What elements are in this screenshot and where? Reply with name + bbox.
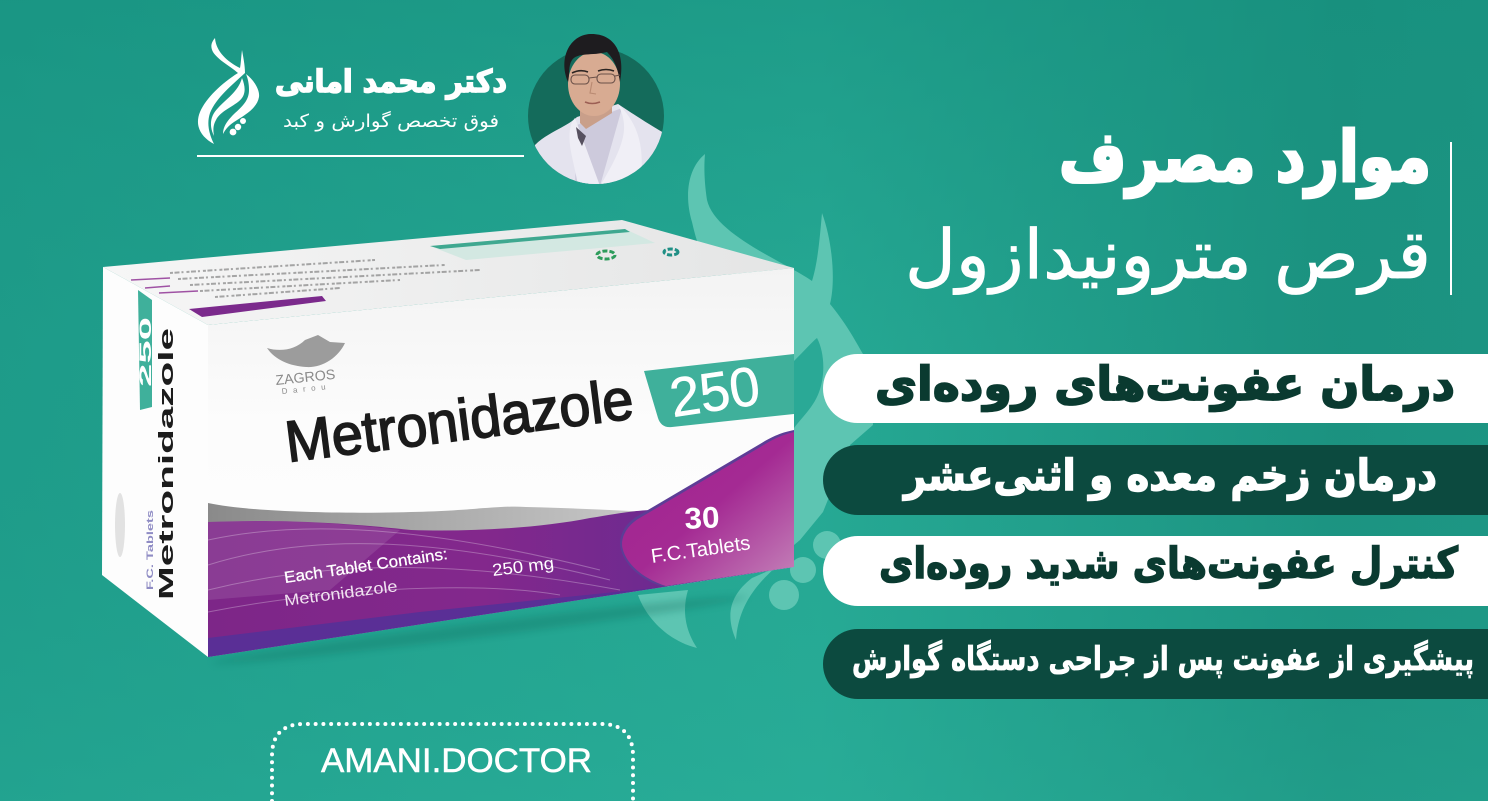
- doctor specialty: فوق تخصص گوارش و کبد: [283, 110, 499, 132]
- box left face: [102, 267, 208, 657]
- website button: AMANI.DOCTOR: [321, 742, 592, 780]
- lab coat: [530, 104, 664, 186]
- tablet count: F.C.Tablets: [650, 532, 752, 568]
- ingredient text: Metronidazole: [283, 578, 399, 610]
- glasses and facial features: [571, 70, 620, 104]
- brand logo: [267, 335, 345, 396]
- neck: [580, 95, 612, 129]
- ingredient text: [283, 546, 555, 610]
- face: [568, 52, 620, 116]
- ingredient text: 250 mg: [491, 554, 555, 580]
- box front face: [208, 268, 800, 680]
- pill 1: درمان عفونت‌های روده‌ای: [875, 357, 1455, 412]
- brand logo: Darou: [281, 382, 326, 396]
- box left face: Metronidazole: [156, 328, 178, 600]
- product name: Metronidazole: [281, 367, 637, 475]
- hair: [564, 34, 621, 82]
- pill 2: [823, 445, 1488, 515]
- strength tag: [644, 354, 794, 429]
- doctor name: دکتر محمد امانی: [275, 64, 507, 100]
- box left face: 250: [136, 317, 155, 387]
- pill 4: [823, 629, 1488, 699]
- medicine box: [102, 220, 800, 680]
- box left face: F.C. Tablets: [145, 510, 155, 590]
- tablet count: [650, 501, 752, 568]
- pill 2: درمان زخم معده و اثنی‌عشر: [902, 451, 1437, 501]
- portrait circle: [528, 48, 664, 184]
- title line 2: قرص مترونیدازول: [905, 216, 1431, 295]
- ingredient text: Each Tablet Contains:: [283, 546, 449, 587]
- doctor portrait: [528, 34, 664, 186]
- logo: [198, 38, 259, 144]
- watermark: calligraphic logo: [638, 154, 873, 648]
- box top face: [103, 220, 794, 325]
- pill 3: [823, 536, 1488, 606]
- brand logo: ZAGROS: [275, 366, 336, 388]
- title: [905, 116, 1431, 295]
- website button: [272, 724, 633, 801]
- tablet count: 30: [684, 501, 720, 536]
- strength tag: 250: [666, 354, 764, 429]
